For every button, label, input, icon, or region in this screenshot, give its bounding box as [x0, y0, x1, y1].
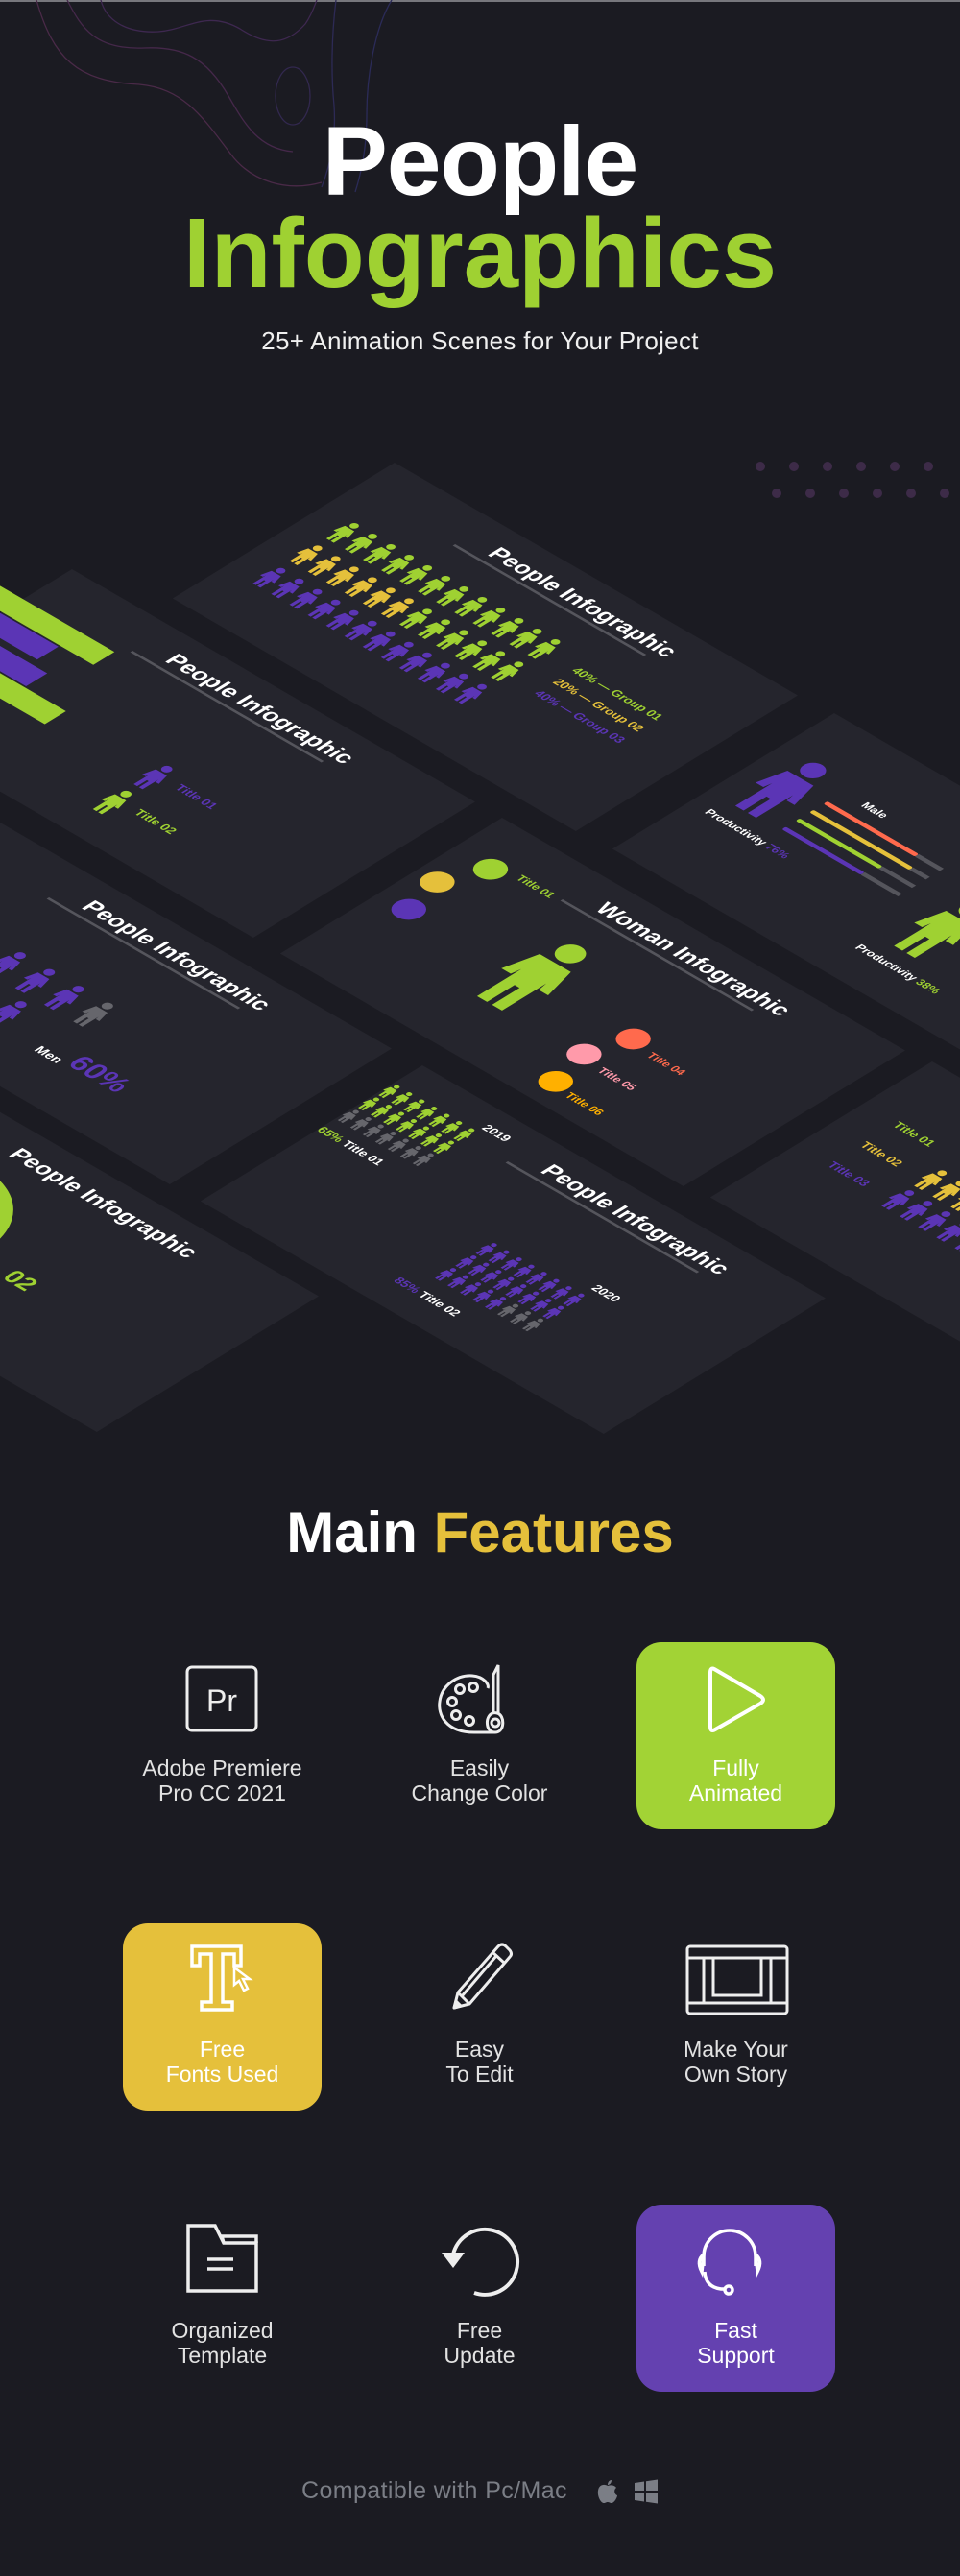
feature: organized template	[171, 2224, 274, 2368]
slide: woman infographic: Woman Infographic	[589, 899, 797, 1020]
slide: 2019 vs 2020: 85% Title 02	[391, 1276, 465, 1318]
feature: change color: Change Color	[412, 1780, 547, 1805]
feature: free fonts (yellow): Free	[200, 2037, 245, 2062]
feature: fast support (purple): Support	[697, 2343, 775, 2368]
decorative contour lines	[36, 0, 392, 192]
slide: women vs men: Men	[31, 1044, 67, 1065]
slide: donut	[0, 1063, 319, 1432]
feature: easy to edit	[445, 1943, 514, 2087]
slide: woman infographic: Title 04	[643, 1050, 689, 1077]
heading: main features: Main Features	[286, 1500, 674, 1564]
feature: change color	[412, 1664, 547, 1805]
slide: male productivity: Male	[858, 800, 892, 821]
slide: woman infographic: Title 05	[594, 1065, 640, 1092]
top border line	[0, 0, 960, 2]
slide: titles people: Title 02	[857, 1139, 906, 1168]
feature: free fonts (yellow)	[123, 1923, 322, 2111]
isometric slides mockup	[0, 463, 960, 1434]
slide: bar chart: People Infographic	[159, 651, 361, 768]
feature: change color: Easily	[450, 1755, 509, 1780]
slide: group people: 40% — Group 01	[568, 665, 666, 722]
feature: premiere: Pro CC 2021	[158, 1780, 286, 1805]
slide: woman infographic	[280, 818, 905, 1186]
feature: make your story: Own Story	[684, 2062, 787, 2087]
slide: titles people: Title 01	[890, 1120, 939, 1149]
feature: organized template: Organized	[171, 2318, 274, 2343]
title: People	[323, 107, 637, 216]
slide: male productivity: Productivity 38%	[852, 942, 944, 996]
icon: apple	[597, 2480, 617, 2503]
feature: free fonts (yellow): Fonts Used	[166, 2062, 278, 2087]
slide: group people: People Infographic	[482, 544, 684, 661]
feature: fast support (purple): Fast	[714, 2318, 757, 2343]
feature: easy to edit: To Edit	[445, 2062, 514, 2087]
slide: group people: 40% — Group 03	[531, 688, 629, 745]
slide: male productivity: Productivity 76%	[702, 807, 794, 861]
title: Infographics	[183, 198, 777, 308]
slide: bar chart	[0, 540, 475, 938]
feature: fully animated (green): Animated	[689, 1780, 782, 1805]
decorative dots	[756, 462, 949, 498]
feature: fully animated (green): Fully	[712, 1755, 759, 1780]
slide: group people: 20% — Group 02	[550, 677, 648, 733]
slide: bar chart: Title 02	[132, 807, 180, 836]
slide: 2019 vs 2020: People Infographic	[535, 1161, 736, 1278]
feature: free update: Update	[444, 2343, 516, 2368]
feature: premiere: Adobe Premiere	[142, 1755, 302, 1780]
feature: free update: Free	[457, 2318, 502, 2343]
feature: fully animated (green)	[636, 1642, 835, 1829]
slide: donut: People Infographic	[3, 1145, 204, 1262]
feature: make your story	[684, 1944, 789, 2087]
slide: 2019 vs 2020	[201, 1065, 826, 1434]
feature: premiere: Pr	[206, 1683, 237, 1718]
feature: organized template: Template	[178, 2343, 267, 2368]
feature: premiere	[142, 1666, 302, 1805]
slide: woman infographic: Title 01	[513, 873, 559, 900]
slide: 2019 vs 2020: 65% Title 01	[314, 1124, 388, 1167]
feature: fast support (purple)	[636, 2205, 835, 2392]
slide: women vs men: 60%	[60, 1052, 137, 1097]
footer: compatibility: Compatible with Pc/Mac	[301, 2477, 567, 2504]
slide: women vs men: People Infographic	[76, 897, 277, 1014]
feature: easy to edit: Easy	[455, 2037, 504, 2062]
slide: women vs men	[0, 816, 392, 1184]
slide: woman infographic: Title 06	[562, 1090, 608, 1117]
feature: free update	[442, 2227, 520, 2368]
slide: 2019 vs 2020: 2020	[588, 1282, 625, 1304]
slide: 2019 vs 2020: 2019	[479, 1122, 515, 1144]
title	[183, 107, 777, 308]
subtitle: 25+ Animation Scenes for Your Project	[261, 326, 699, 355]
slide: titles people: Title 03	[825, 1159, 874, 1188]
slide: titles people	[710, 1061, 960, 1430]
slide: male productivity	[612, 713, 960, 1082]
slide: bar chart: Title 01	[172, 782, 221, 811]
slide: group people	[173, 463, 798, 831]
icon: windows	[635, 2480, 658, 2503]
feature: make your story: Make Your	[684, 2037, 788, 2062]
